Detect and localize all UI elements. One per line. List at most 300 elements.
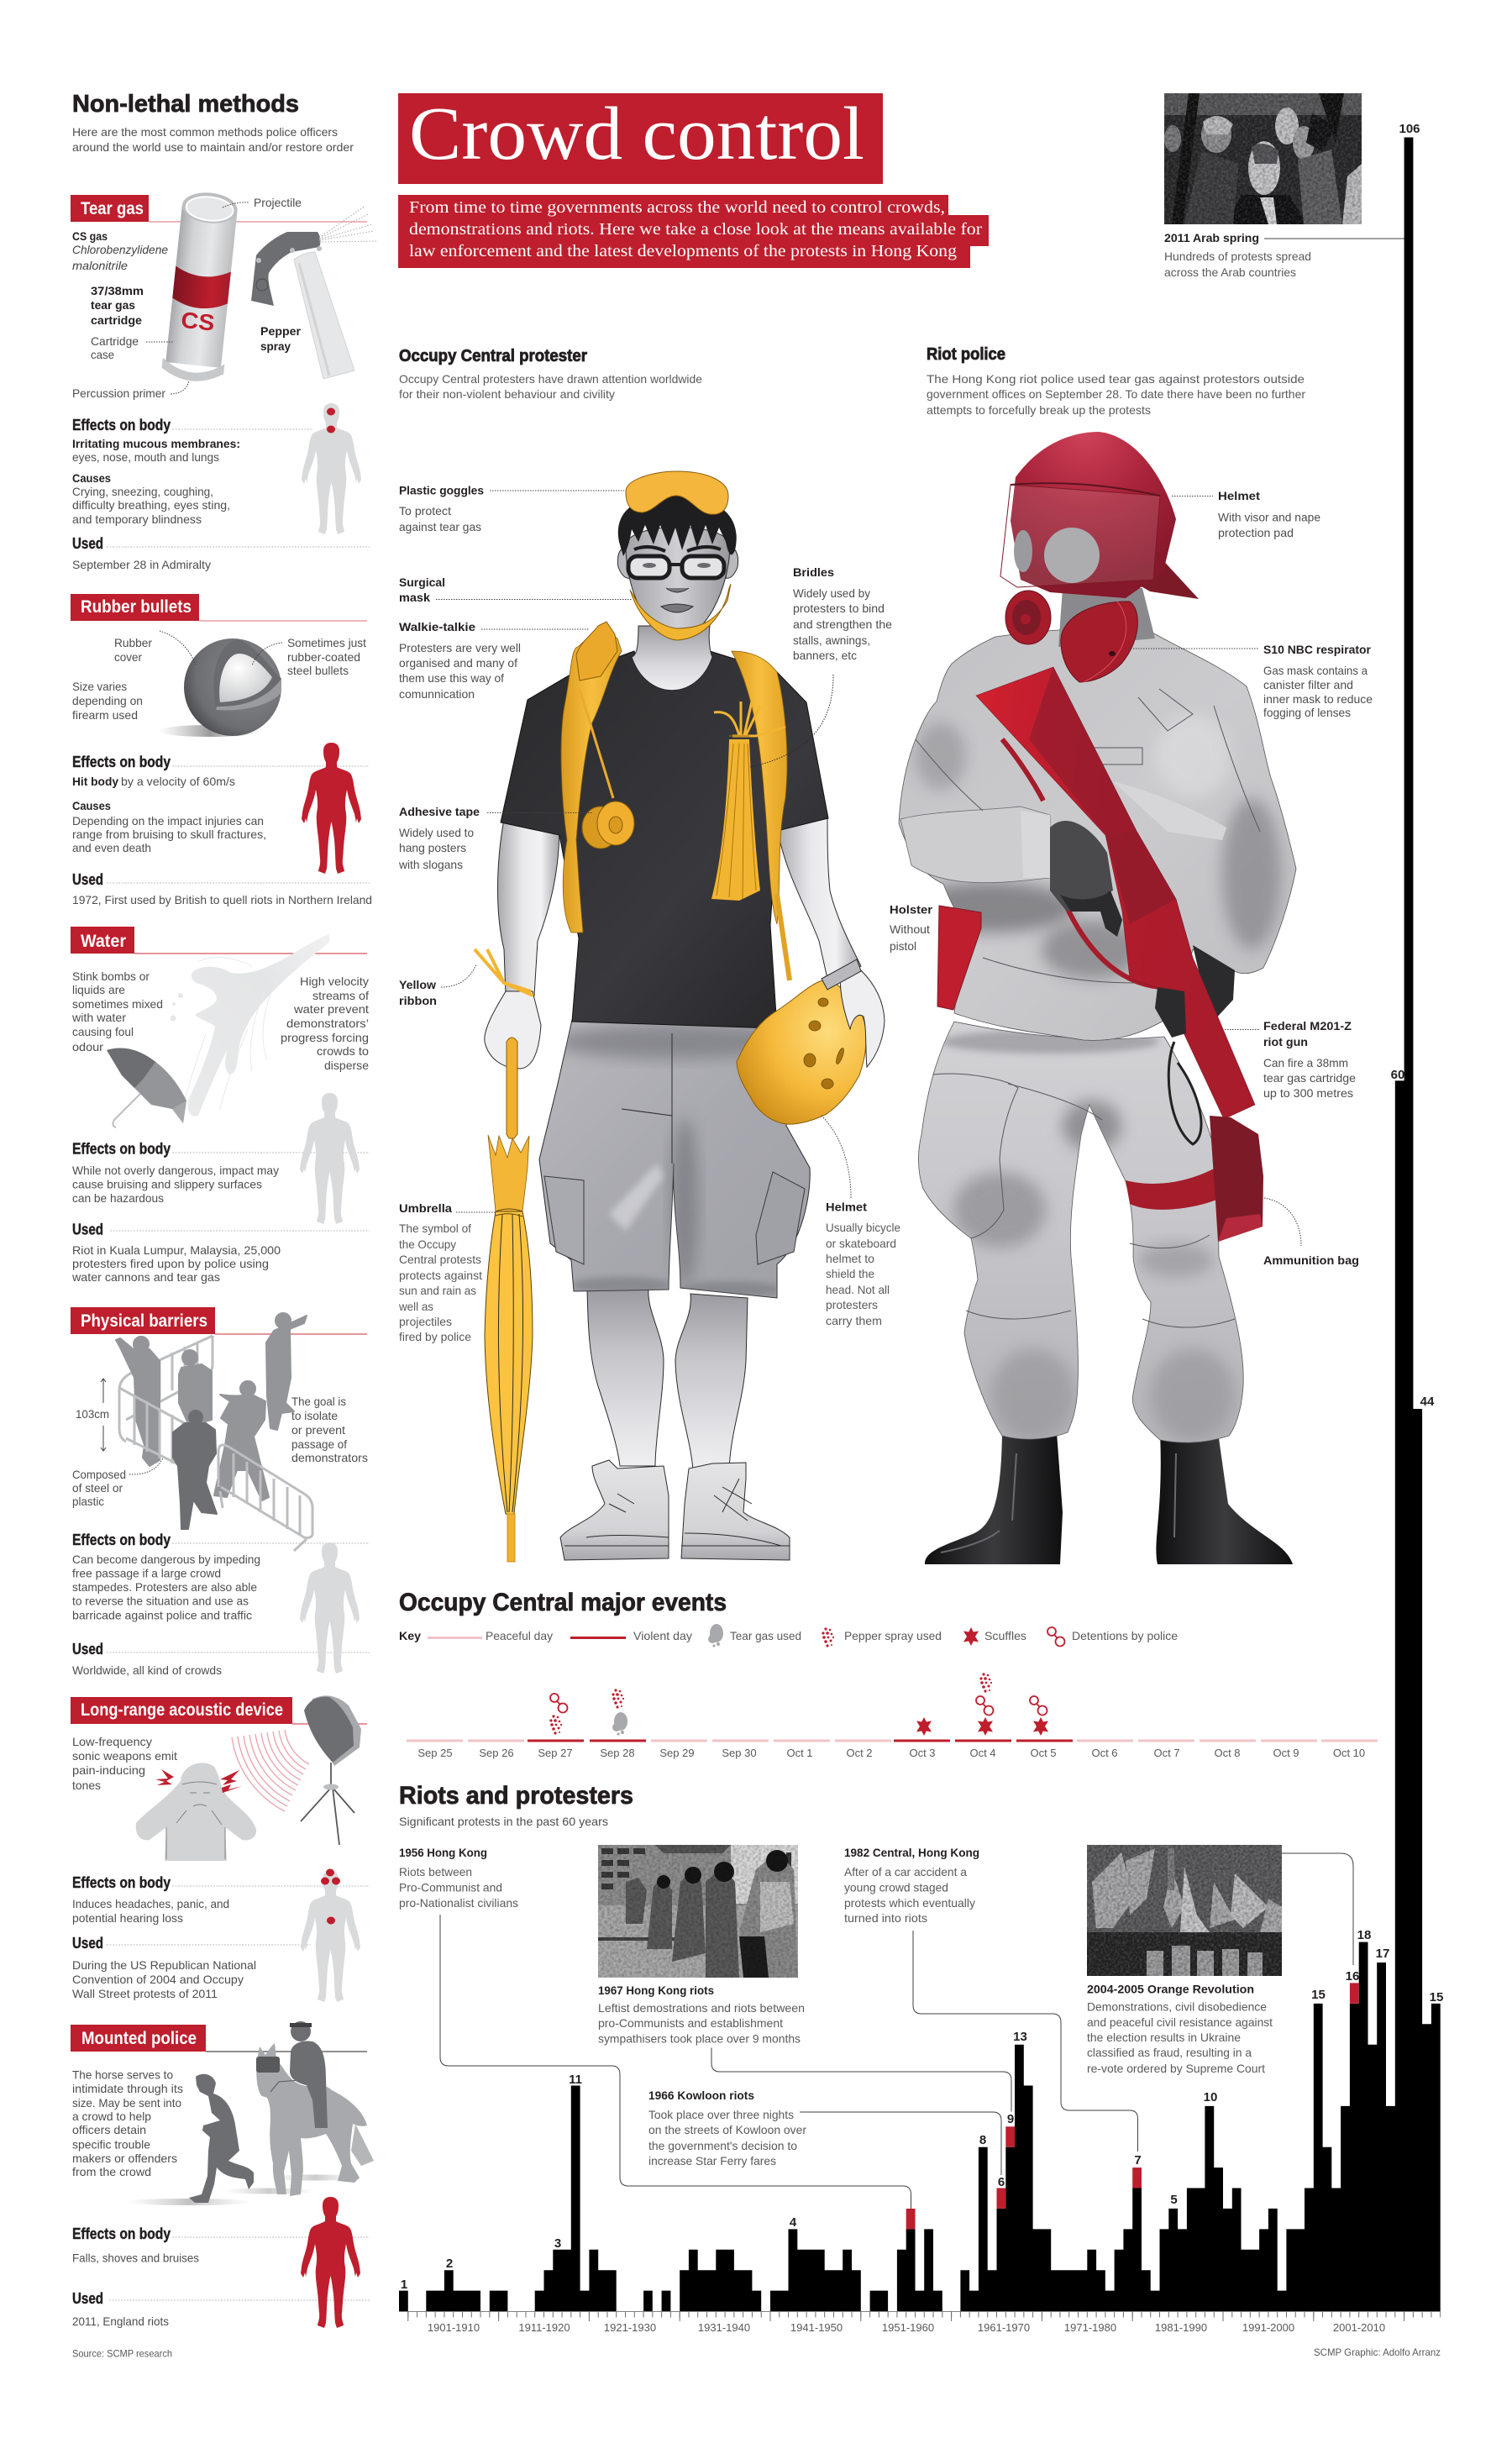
yellow ribbon: [475, 949, 533, 996]
callouts: protester: shield the: [826, 1267, 874, 1280]
caption: 2011 Arab spring: 2011 Arab spring: [1164, 231, 1259, 244]
text: tear gas effects: Irritating mucous membranes:: [72, 437, 240, 450]
bar chart: riots per year: 106: [1399, 122, 1420, 136]
legend: key: [399, 1624, 1178, 1647]
callouts: protester: Widely used by: [793, 586, 870, 600]
holster: [937, 906, 981, 1010]
text: barriers effects: to reverse the situation and use as: [72, 1595, 249, 1608]
timeline: occupy central events: Sep 26: [479, 1747, 514, 1759]
heading: non-lethal methods: Non-lethal methods: [72, 91, 299, 118]
callouts: protester: Usually bicycle: [826, 1221, 900, 1234]
callouts: riot police: protection pad: [1218, 526, 1294, 539]
text: tear gas effects: and temporary blindness: [72, 512, 202, 526]
annotation: 1982 Central, Hong Kong: turned into riots: [844, 1911, 927, 1925]
panel: physical barriers: demonstrators: [291, 1451, 368, 1464]
panel: tear gas: Percussion primer: [72, 386, 165, 400]
legend: key: Tear gas used: [730, 1629, 801, 1642]
callouts: protester: Bridles: [793, 565, 834, 579]
text: water effects: water cannons and tear gas: [71, 1270, 220, 1284]
legend: key: Violent day: [633, 1629, 692, 1642]
annotation: 1966 Kowloon riots: Took place over three nights: [648, 2108, 794, 2121]
icon: barrier back: [119, 1336, 213, 1442]
panel: water: streams of: [312, 989, 369, 1002]
callouts: protester: fired by police: [399, 1330, 471, 1343]
callouts: protester: protesters: [826, 1298, 878, 1311]
panel: physical barriers: Physical barriers: [81, 1311, 207, 1331]
text: rubber bullets effects: Depending on the impact injuries can: [72, 814, 264, 828]
panel: rubber bullets: [71, 594, 367, 737]
callouts: protester: comunnication: [399, 687, 475, 701]
panel: tear gas: Cartridge: [91, 334, 139, 348]
bar chart: riots per year: 1961-1970: [978, 2321, 1030, 2334]
timeline: occupy central events: Sep 29: [659, 1747, 695, 1759]
heading: riots and protesters: Riots and protesters: [399, 1782, 633, 1810]
surgical mask: [630, 584, 731, 640]
text: rubber bullets effects: [72, 754, 372, 906]
text: barriers effects: Can become dangerous by impeding: [72, 1553, 260, 1566]
text: water effects: Effects on body: [72, 1141, 171, 1158]
panel: mounted police: makers or offenders: [72, 2152, 177, 2165]
timeline: occupy central events: Oct 6: [1091, 1747, 1118, 1759]
trousers: [918, 1022, 1243, 1442]
heading: riot police: government offices on September 28. To date there have been no further: [927, 387, 1305, 401]
panel: physical barriers: passage of: [291, 1437, 347, 1451]
panel: rubber bullets: Rubber: [114, 636, 152, 649]
icon: body figure barriers: [300, 1542, 360, 1673]
adhesive tape: [580, 689, 634, 849]
text: rubber bullets effects: by a velocity of 60m/s: [121, 775, 235, 788]
panel: mounted police: intimidate through its: [72, 2082, 183, 2095]
callouts: protester: To protect: [399, 504, 451, 518]
bar chart: riots per year: 1941-1950: [790, 2321, 843, 2334]
callouts: protester: [398, 484, 900, 1343]
icon: oct 3: [916, 1717, 932, 1736]
panel: physical barriers: plastic: [72, 1495, 104, 1508]
callouts: riot police: Helmet: [1218, 489, 1260, 502]
panel: rubber bullets: depending on: [72, 694, 143, 707]
intro text: law enforcement and the latest developments of the protests in Hong Kong: [409, 242, 957, 260]
callouts: protester: stalls, awnings,: [793, 633, 870, 647]
text: tear gas effects: [72, 417, 370, 571]
callouts: protester: The symbol of: [399, 1222, 471, 1235]
panel: rubber bullets: Rubber bullets: [81, 597, 192, 617]
bar chart: riots per year: 1951-1960: [882, 2321, 934, 2334]
callouts: protester: banners, etc: [793, 649, 857, 662]
annotation: 1966 Kowloon riots: 1966 Kowloon riots: [648, 2089, 754, 2102]
callouts: protester: against tear gas: [399, 520, 481, 533]
callouts: protester: Helmet: [826, 1200, 867, 1213]
callouts: protester: Protesters are very well: [399, 641, 521, 654]
panel: water: High velocity: [300, 975, 369, 988]
text: mounted effects: 2011, England riots: [72, 2315, 169, 2328]
panel: water: liquids are: [72, 983, 125, 996]
text: tear gas effects: Used: [72, 535, 103, 552]
bar chart: riots per year: 60: [1391, 1068, 1404, 1082]
callouts: riot police: canister filter and: [1263, 678, 1353, 691]
text: water effects: Riot in Kuala Lumpur, Malaysia, 25,000: [72, 1243, 281, 1257]
panel: physical barriers: to isolate: [291, 1409, 338, 1422]
annotation: 1982 Central, Hong Kong: 1982 Central, Hong Kong: [844, 1846, 979, 1859]
timeline: occupy central events: Sep 30: [722, 1747, 757, 1759]
icon: body figure tear gas: [302, 403, 361, 534]
text: water effects: While not overly dangerous, impact may: [72, 1164, 279, 1177]
panel: physical barriers: or prevent: [291, 1423, 345, 1437]
umbrella: [485, 1038, 533, 1562]
callouts: protester: carry them: [826, 1314, 882, 1327]
text: tear gas effects: Crying, sneezing, coughing,: [72, 485, 213, 498]
panel: mounted police: [71, 2021, 374, 2205]
text: rubber bullets effects: range from bruising to skull fractures,: [72, 828, 266, 841]
bar chart: riots per year: 10: [1204, 2090, 1217, 2104]
text: acoustic effects: Effects on body: [72, 1874, 171, 1891]
text: tear gas effects: Effects on body: [72, 417, 171, 433]
gas mask canister: [1061, 602, 1137, 682]
icon: barrier front right: [218, 1445, 312, 1551]
heading: occupy central protester: [399, 347, 702, 401]
panel: long-range acoustic device: Long-range acoustic device: [81, 1700, 283, 1720]
text: acoustic effects: [72, 1874, 370, 2000]
text: barriers effects: barricade against police and traffic: [72, 1608, 252, 1621]
panel: physical barriers: of steel or: [72, 1481, 123, 1495]
icon: tear gas cartridge: CS: [180, 307, 216, 336]
annotation: 1956 Hong Kong: 1956 Hong Kong: [399, 1846, 487, 1859]
callouts: riot police: Without: [890, 922, 930, 936]
caption: 2011 Arab spring: Hundreds of protests spread: [1164, 250, 1311, 263]
text: rubber bullets effects: 1972, First used by British to quell riots in Northern Ireland: [72, 893, 372, 906]
icon: tear gas cartridge: [160, 190, 242, 384]
caption: 2004-2005 Orange Revolution: re-vote ordered by Supreme Court: [1087, 2062, 1265, 2075]
panel: rubber bullets: Sometimes just: [287, 636, 366, 649]
text: rubber bullets effects: Causes: [72, 799, 111, 812]
bar chart: riots per year: 9: [1007, 2112, 1014, 2126]
bar chart: riots per year: 1991-2000: [1242, 2321, 1294, 2334]
callouts: protester: protesters to bind: [793, 602, 885, 615]
text: acoustic effects: Induces headaches, panic, and: [72, 1897, 229, 1910]
caption: 1967 Hong Kong riots: pro-Communists and establishment: [598, 2016, 783, 2030]
forearm: [900, 807, 1050, 883]
neck: [632, 626, 712, 691]
panel: mounted police: size. May be sent into: [72, 2096, 181, 2110]
caption: 2004-2005 Orange Revolution: the election results in Ukraine: [1087, 2031, 1241, 2044]
callouts: protester: helmet to: [826, 1252, 874, 1265]
annotation: 1956 Hong Kong: Pro-Communist and: [399, 1881, 502, 1894]
heading: riots and protesters: [399, 1782, 633, 1828]
callouts: riot police: Holster: [890, 902, 933, 916]
panel: water: disperse: [324, 1059, 369, 1072]
icon: protester left: [116, 1337, 160, 1466]
title: Crowd control: [409, 92, 864, 176]
shirt: [501, 651, 828, 1028]
icon: protester with raised arm: [266, 1313, 307, 1430]
callouts: riot police: riot gun: [1263, 1035, 1308, 1048]
photo: Arab spring: [1164, 93, 1362, 224]
head: [617, 471, 738, 640]
timeline: occupy central events: Sep 27: [538, 1747, 573, 1759]
jacket: [899, 628, 1296, 1327]
caption: 2004-2005 Orange Revolution: Demonstrations, civil disobedience: [1087, 2000, 1267, 2014]
legend: key: Pepper spray used: [844, 1629, 942, 1642]
heading: riot police: attempts to forcefully break up the protests: [927, 403, 1151, 417]
panel: long-range acoustic device: tones: [72, 1779, 101, 1792]
panel: mounted police: The horse serves to: [72, 2068, 173, 2082]
panel: tear gas: malonitrile: [72, 259, 128, 272]
bar chart: riots per year: [399, 122, 1443, 2334]
icon: horse: [256, 2043, 374, 2196]
panel: water: causing foul: [72, 1025, 134, 1038]
text: rubber bullets effects: Used: [72, 871, 103, 888]
callouts: protester: Widely used to: [399, 826, 474, 839]
callouts: protester: sun and rain as: [399, 1284, 476, 1297]
callouts: riot police: Ammunition bag: [1263, 1253, 1359, 1267]
callouts: riot police: up to 300 metres: [1263, 1086, 1353, 1100]
callouts: protester: or skateboard: [826, 1237, 896, 1250]
text: barriers effects: stampedes. Protesters are also able: [72, 1580, 257, 1594]
bar chart: riots per year: 18: [1357, 1928, 1371, 1942]
text: acoustic effects: Used: [72, 1935, 103, 1952]
bar chart: riots per year: 1911-1920: [518, 2321, 570, 2334]
icon: rider: [290, 2021, 328, 2128]
callouts: riot police: Can fire a 38mm: [1263, 1056, 1348, 1069]
icon: running protester: [189, 2074, 254, 2203]
text: mounted effects: Used: [72, 2290, 103, 2307]
callouts: protester: mask: [399, 591, 430, 604]
heading: occupy central protester: Occupy Central protesters have drawn attention worldwide: [399, 372, 702, 386]
panel: rubber bullets: cover: [114, 650, 142, 664]
callouts: protester: protects against: [399, 1269, 482, 1282]
shoes: [560, 1460, 790, 1560]
bar chart: riots per year: 16: [1346, 1969, 1359, 1984]
text: acoustic effects: potential hearing loss: [72, 1911, 183, 1925]
illustration: riot police: [899, 432, 1296, 1564]
panel: tear gas: 37/38mm: [91, 284, 144, 297]
icon: man covering ears: [136, 1763, 256, 1861]
icon: water jet: [170, 934, 329, 1117]
annotation: 1982 Central, Hong Kong: young crowd staged: [844, 1881, 948, 1894]
annotation: 1966 Kowloon riots: the government's decision to: [648, 2139, 797, 2152]
straps: [561, 626, 787, 933]
caption: 1967 Hong Kong riots: sympathisers took place over 9 months: [598, 2031, 801, 2045]
callouts: protester: projectiles: [399, 1315, 452, 1328]
timeline: occupy central events: Sep 25: [417, 1747, 453, 1759]
callouts: riot police: Gas mask contains a: [1263, 664, 1368, 677]
sling: [1002, 739, 1160, 987]
heading: non-lethal methods: [72, 91, 354, 154]
text: acoustic effects: Wall Street protests of 2011: [72, 1987, 218, 2000]
panel: tear gas: Pepper: [260, 324, 302, 338]
panel: water: water prevent: [293, 1002, 369, 1016]
panel: water: with water: [71, 1011, 126, 1024]
bar chart: riots per year: 1901-1910: [428, 2321, 480, 2334]
caption: 1967 Hong Kong riots: 1967 Hong Kong riots: [598, 1984, 714, 1997]
heading: riots and protesters: Significant protests in the past 60 years: [399, 1815, 608, 1828]
bar chart: riots per year: 1: [401, 2278, 407, 2292]
text: acoustic effects: During the US Republican National: [72, 1958, 256, 1972]
timeline: occupy central events: Oct 5: [1030, 1747, 1057, 1759]
callouts: protester: them use this way of: [399, 671, 504, 685]
leader lines: [440, 1853, 1353, 2209]
bar chart: riots per year: 1921-1930: [604, 2321, 656, 2334]
front gloves: [1050, 821, 1186, 1038]
ammunition bag: [1126, 1116, 1263, 1242]
bar chart: riots per year: 15: [1430, 1990, 1443, 2005]
text: rubber bullets effects: Effects on body: [72, 754, 171, 770]
timeline: occupy central events: Oct 4: [969, 1747, 996, 1759]
annotation: 1966 Kowloon riots: on the streets of Kowloon over: [648, 2123, 806, 2136]
panel: physical barriers: Composed: [72, 1468, 126, 1481]
panel: tear gas: tear gas: [91, 298, 135, 312]
bar chart: riots per year: 8: [979, 2133, 986, 2147]
callouts: riot police: inner mask to reduce: [1263, 692, 1373, 706]
bar chart: riots per year: 15: [1311, 1988, 1326, 2002]
panel: tear gas: CS gas: [72, 229, 108, 243]
icon: riot officer silhouette: [173, 1411, 217, 1529]
text: source: Source: SCMP research: [72, 2347, 172, 2359]
panel: mounted police: from the crowd: [72, 2165, 151, 2178]
panel: long-range acoustic device: sonic weapons emit: [72, 1749, 177, 1763]
heading: occupy central protester: for their non-violent behaviour and civility: [399, 387, 615, 401]
icon: barrier front left: [119, 1388, 189, 1469]
callouts: protester: the Occupy: [399, 1237, 456, 1251]
text: tear gas effects: September 28 in Admiralty: [72, 558, 211, 571]
panel: water: crowds to: [317, 1044, 369, 1058]
icon: pepper spray: [251, 206, 377, 379]
icon: protester centre: [179, 1350, 212, 1426]
panel: physical barriers: [71, 1307, 368, 1551]
icons: sep 27: [549, 1694, 568, 1735]
heading: occupy central major events: Occupy Central major events: [399, 1589, 727, 1616]
panel: water: Stink bombs or: [72, 969, 150, 983]
icon: body figure water: [300, 1093, 360, 1224]
panel: water: progress forcing: [281, 1031, 369, 1044]
callouts: protester: and strengthen the: [793, 617, 892, 631]
watch: [822, 959, 861, 990]
panel: tear gas: [71, 190, 377, 400]
caption: 2004-2005 Orange Revolution: classified as fraud, resulting in a: [1087, 2046, 1252, 2059]
panel: mounted police: officers detain: [72, 2123, 146, 2136]
callouts: riot police: tear gas cartridge: [1263, 1071, 1356, 1085]
panel: water: [71, 927, 369, 1127]
bar chart: riots per year: 6: [998, 2175, 1005, 2189]
annotation: 1982 Central, Hong Kong: After of a car accident a: [844, 1865, 967, 1878]
bar chart: riots per year: 1931-1940: [698, 2321, 750, 2334]
timeline: occupy central events: Oct 1: [786, 1747, 813, 1759]
icon: body figure rubber bullets: [302, 743, 361, 874]
callouts: riot police: Federal M201-Z: [1263, 1019, 1352, 1032]
text: water effects: can be hazardous: [72, 1191, 164, 1205]
goggles: [626, 471, 728, 514]
annotation: 1982 Central, Hong Kong: protests which eventually: [844, 1896, 975, 1910]
arms: [485, 815, 861, 1069]
bar chart: riots per year: 1971-1980: [1064, 2321, 1116, 2334]
callouts: protester: Plastic goggles: [399, 484, 484, 497]
panel: water: demonstrators’: [286, 1017, 369, 1030]
photo: 1967 Hong Kong riots: [598, 1845, 798, 1978]
bar chart: riots per year: 44: [1420, 1395, 1435, 1409]
photo: 2004-2005 Orange Revolution: [1087, 1845, 1282, 1976]
heading: riot police: [927, 345, 1305, 417]
icons: oct 5: [1030, 1696, 1048, 1736]
panel: tear gas: spray: [260, 339, 291, 353]
caption: 1967 Hong Kong riots: Leftist demostrations and riots between: [598, 2001, 805, 2015]
bar chart: riots per year: 4: [790, 2215, 797, 2230]
timeline: occupy central events: Oct 2: [846, 1747, 873, 1759]
timeline: occupy central events: Oct 10: [1333, 1747, 1365, 1759]
walkie-talkie pouch: [576, 622, 617, 680]
text: mounted effects: Falls, shoves and bruises: [72, 2251, 199, 2265]
intro text: From time to time governments across the world need to control crowds,: [409, 198, 945, 217]
callouts: protester: well as: [398, 1300, 433, 1313]
panel: mounted police: specific trouble: [72, 2137, 150, 2151]
panel: tear gas: Tear gas: [81, 199, 144, 218]
annotation: 1956 Hong Kong: [399, 1846, 518, 1910]
text: rubber bullets effects: and even death: [72, 841, 151, 854]
icon: rubber bullet: [158, 638, 281, 737]
panel: tear gas: Chlorobenzylidene: [72, 243, 168, 256]
callouts: protester: Central protests: [399, 1253, 481, 1266]
icon: sound waves: [232, 1730, 309, 1811]
heading: occupy central protester: Occupy Central protester: [399, 347, 587, 365]
callouts: protester: Yellow: [399, 978, 436, 991]
bar chart: riots per year: 1981-1990: [1155, 2321, 1207, 2334]
callouts: riot police: [890, 489, 1373, 1267]
timeline: occupy central events: Oct 8: [1214, 1747, 1241, 1759]
intro text: [398, 195, 989, 268]
panel: rubber bullets: Size varies: [72, 680, 127, 693]
bar chart: riots per year: 3: [554, 2236, 561, 2251]
callouts: riot police: fogging of lenses: [1263, 706, 1351, 719]
panel: tear gas: Projectile: [254, 196, 302, 209]
panel: tear gas: cartridge: [91, 313, 142, 327]
panel: physical barriers: 103cm: [76, 1407, 109, 1421]
caption: 2004-2005 Orange Revolution: 2004-2005 Orange Revolution: [1087, 1983, 1254, 1996]
police head: [1000, 432, 1199, 682]
timeline: occupy central events: [407, 1673, 1378, 1759]
right hand: [840, 970, 885, 1067]
annotation: 1982 Central, Hong Kong: [844, 1846, 979, 1925]
shorts: [539, 1020, 810, 1298]
panel: rubber bullets: firearm used: [72, 708, 138, 722]
riot gun: [976, 667, 1255, 1119]
timeline: occupy central events: Oct 9: [1273, 1747, 1299, 1759]
callouts: protester: Walkie-talkie: [399, 620, 475, 633]
bar chart: riots per year: 17: [1376, 1947, 1389, 1961]
panel: water: odour: [72, 1040, 103, 1053]
caption: 2011 Arab spring: across the Arab countries: [1164, 265, 1296, 279]
legend: key: Scuffles: [984, 1629, 1026, 1642]
legs: [587, 1290, 748, 1470]
panel: long-range acoustic device: [71, 1695, 367, 1861]
caption: 2004-2005 Orange Revolution: and peaceful civil resistance against: [1087, 2015, 1273, 2029]
bar chart: riots per year: 11: [569, 2073, 582, 2087]
callouts: protester: head. Not all: [826, 1283, 890, 1296]
intro text: demonstrations and riots. Here we take a close look at the means available for: [409, 220, 982, 239]
callouts: riot police: pistol: [890, 939, 916, 953]
text: barriers effects: Used: [72, 1641, 103, 1658]
bridles: [711, 701, 785, 901]
legend: key: Key: [399, 1629, 421, 1642]
bar chart: riots per year: 2001-2010: [1333, 2321, 1385, 2334]
heading: riot police: The Hong Kong riot police used tear gas against protestors outside: [927, 372, 1305, 386]
boots: [925, 1432, 1293, 1564]
annotation: 1966 Kowloon riots: [648, 2089, 806, 2167]
panel: long-range acoustic device: pain-inducing: [72, 1763, 145, 1777]
helmet strap: [777, 895, 790, 980]
callouts: protester: organised and many of: [399, 656, 517, 670]
caption: 1967 Hong Kong riots: [598, 1984, 805, 2045]
text: water effects: Used: [72, 1222, 103, 1238]
illustration: protester: [475, 471, 885, 1562]
text: water effects: cause bruising and slippery surfaces: [72, 1178, 262, 1191]
